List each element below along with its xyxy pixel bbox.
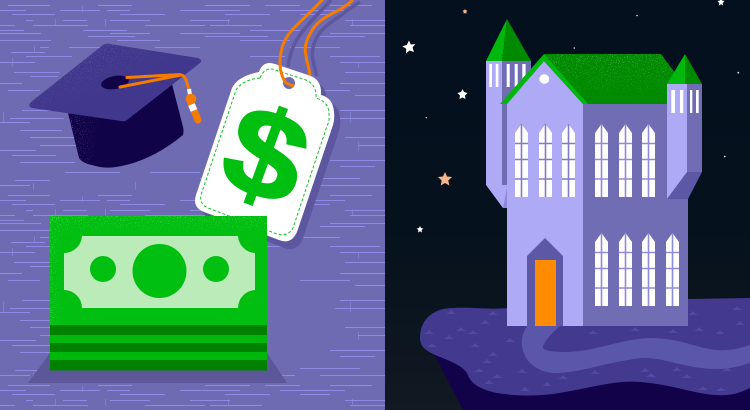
main roof	[544, 54, 675, 104]
stack shadow	[28, 353, 287, 383]
stars	[402, 0, 739, 232]
island underside	[432, 350, 750, 410]
island grass tufts	[424, 306, 745, 391]
door surround	[527, 238, 563, 326]
bill side circles	[90, 256, 229, 282]
left tower walls	[486, 61, 502, 185]
tag body	[195, 63, 334, 241]
front wall with gable	[507, 61, 583, 326]
side upper windows	[595, 124, 655, 197]
bill inner panel	[64, 236, 255, 308]
string shadows	[288, 0, 360, 76]
hole	[283, 77, 295, 89]
star: small orange	[462, 9, 468, 14]
island top surface	[420, 298, 750, 396]
tag shadow	[201, 70, 340, 249]
gable trim	[500, 54, 588, 104]
star: large orange	[438, 172, 452, 186]
left tower	[486, 19, 531, 208]
floating island	[420, 298, 750, 410]
dollar sign: $	[205, 76, 326, 233]
side wall	[583, 104, 688, 326]
star: top right white	[718, 0, 724, 6]
left tower windows	[489, 64, 526, 87]
panel: left purple background	[0, 0, 385, 410]
stacked bill edges	[50, 325, 267, 370]
cap button hole	[100, 73, 130, 92]
left tower roof	[486, 19, 507, 61]
tassel cords	[120, 74, 189, 90]
right tower	[667, 54, 702, 199]
orange strings	[280, 0, 353, 86]
winding path	[522, 326, 750, 373]
distant dots	[426, 15, 739, 157]
gable round window	[539, 74, 549, 84]
star: large white	[402, 40, 415, 54]
door	[535, 260, 556, 326]
right tower walls	[667, 84, 687, 199]
building: college	[486, 19, 702, 326]
cap base	[68, 84, 184, 168]
right tower roof	[667, 54, 685, 84]
right tower base	[667, 172, 702, 199]
tassel	[186, 89, 198, 120]
icon: graduation cap	[29, 44, 201, 168]
star: medium white	[458, 89, 468, 99]
cap board	[29, 44, 201, 121]
bill centre circle	[132, 244, 186, 298]
front upper windows	[515, 124, 575, 197]
stitched border	[201, 69, 329, 235]
left tower base	[486, 185, 507, 208]
icon: price tag	[195, 0, 360, 249]
right tower windows	[671, 90, 699, 113]
bill face	[50, 216, 267, 326]
side lower windows	[595, 233, 679, 306]
star: small white	[417, 226, 423, 232]
icon: stack of banknotes	[28, 216, 287, 383]
panel: right night sky	[385, 0, 750, 410]
